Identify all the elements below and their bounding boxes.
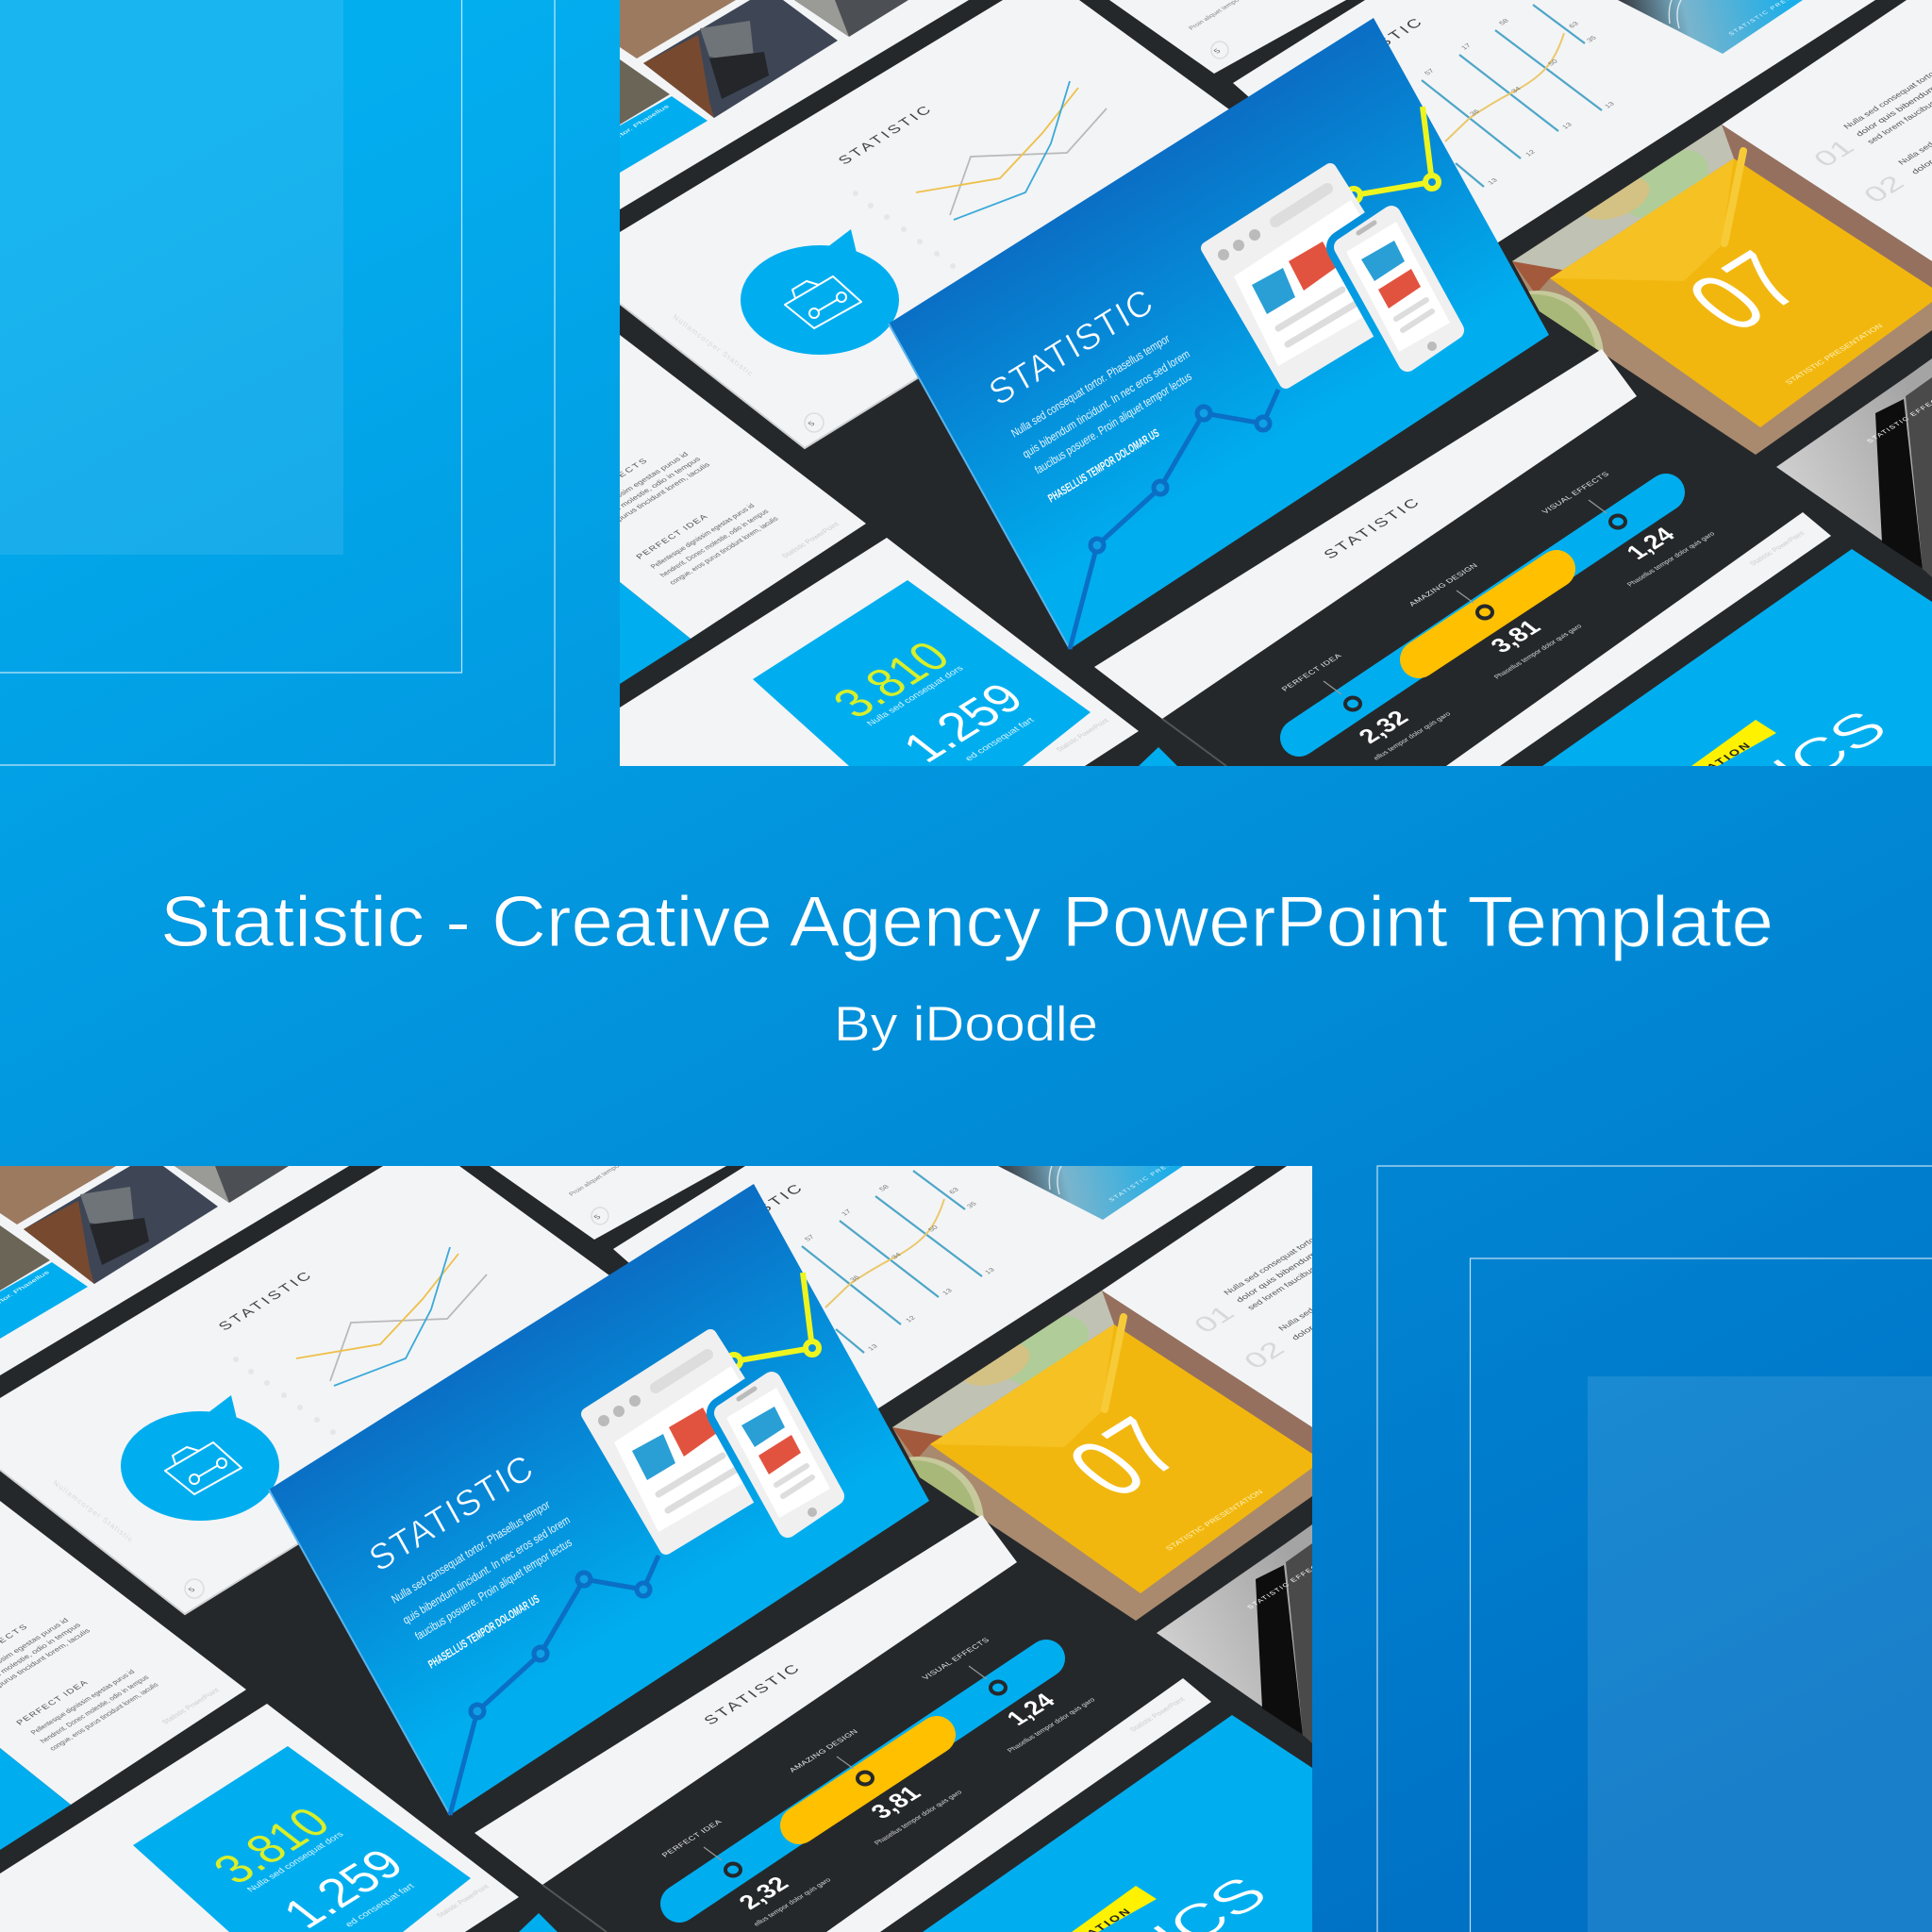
axis values: 63	[947, 1186, 960, 1195]
bar values: 3,81	[1485, 616, 1546, 657]
title: Statistic - Creative Agency PowerPoint Template	[160, 882, 1774, 962]
footer text: Statistic PowerPoint	[1127, 1695, 1187, 1733]
icon: phone	[724, 1381, 835, 1528]
bar captions: Phasellus tempor dolor quis garo	[873, 1789, 964, 1846]
page number	[185, 1579, 204, 1598]
bar labels: PERFECT IDEA	[659, 1818, 724, 1858]
slide: dark statistic bars	[475, 1515, 1211, 1932]
slide: upper page number: Proin aliquet tempor	[567, 1161, 624, 1197]
slide: big numbers	[620, 538, 1139, 771]
list copy: Nulla sed consequat tortor. Phasellus	[1276, 1247, 1412, 1332]
trend curve	[1445, 33, 1564, 142]
section caption: STATISTIC PRESENTATION	[1783, 322, 1885, 386]
copy: perfect idea: congue, eros purus tincidunt lorem, iaculis	[667, 515, 780, 586]
caption: ed consequat fart	[963, 716, 1037, 763]
yellow tag	[1072, 1886, 1157, 1932]
slide: grey photo	[1157, 1524, 1330, 1743]
footer bar	[1446, 512, 1831, 766]
axis values: 17	[1459, 42, 1473, 51]
bar values	[1353, 523, 1681, 747]
heading: STATISTIC	[703, 1182, 806, 1247]
bar labels: VISUAL EFFECTS	[920, 1636, 991, 1681]
bar labels: VISUAL EFFECTS	[1540, 470, 1611, 515]
heading: STATISTIC	[982, 281, 1159, 413]
bar values: 2,32	[1353, 707, 1414, 747]
line values	[1422, 5, 1602, 187]
copy: perfect idea: Pellentesque dignissim egestas purus id	[648, 502, 757, 570]
trend line upper	[1333, 107, 1439, 264]
bar highlight	[1419, 569, 1557, 659]
number 1.259: 1.259	[891, 675, 1036, 771]
bar captions: Phasellus tempor dolor quis garo	[1006, 1696, 1097, 1754]
slide: yellow section 07	[852, 1291, 1312, 1621]
heading: effects: PERFECT EFFECTS	[543, 457, 650, 524]
axis values: 34	[890, 1251, 903, 1260]
heading: STATISTIC	[836, 104, 935, 167]
tag text: ATION	[1704, 740, 1755, 773]
bar captions	[752, 1696, 1097, 1927]
cover photo thumbnail	[1618, 0, 1803, 54]
footer: Statistic PowerPoint	[779, 520, 841, 559]
bar highlight	[799, 1735, 937, 1825]
bar values: 1,24	[1001, 1689, 1061, 1729]
slide: statistic bar lines chart	[1233, 0, 1875, 259]
heading: STATISTIC	[216, 1270, 315, 1333]
number 02: 02	[1238, 1337, 1291, 1374]
slide: statistic with speech bubble	[0, 1166, 665, 1614]
page number: 5	[806, 420, 817, 427]
footer text: Statistic PowerPoint	[1747, 529, 1807, 567]
heading: STATISTIC	[1323, 16, 1425, 81]
axis values: 36	[848, 1274, 861, 1283]
caption on photo slide: tortor. Phasellus	[609, 104, 672, 142]
icon: speech bubble with briefcase	[121, 1395, 279, 1521]
body copy: faucibus posuere. Proin aliquet tempor lectus	[413, 1536, 575, 1643]
axis values: 36	[1468, 108, 1481, 117]
axis values: 35	[965, 1200, 978, 1209]
slide: text with perfect idea	[620, 335, 866, 684]
slide: statistic with speech bubble	[620, 0, 1285, 448]
number 07: 07	[1664, 235, 1825, 348]
copy: effects	[620, 451, 709, 523]
body copy: quis bibendum tincidunt. In nec eros sed lorem	[1021, 347, 1192, 461]
chart axis dots	[233, 1357, 336, 1435]
heading: STATISTIC	[700, 1662, 803, 1727]
bar captions: ellus tempor dolor quis garo	[752, 1876, 833, 1927]
number 01: 01	[1807, 135, 1860, 172]
bar values	[733, 1689, 1061, 1913]
list copy	[1843, 73, 1932, 174]
bottom slide collage	[0, 1138, 1412, 1932]
bar captions	[1372, 530, 1717, 761]
number 07: 07	[1044, 1401, 1206, 1514]
cover photo thumbnail	[998, 1138, 1211, 1220]
body copy: quis bibendum tincidunt. In nec eros sed lorem	[401, 1513, 573, 1627]
axis values: 13	[1560, 121, 1574, 130]
bar captions: Phasellus tempor dolor quis garo	[1492, 623, 1584, 680]
bottom-right frame decoration	[1377, 1166, 1932, 1932]
list copy: sed lorem faucibus posuere	[1245, 1246, 1348, 1311]
slide: upper page number: 5	[1211, 47, 1223, 55]
bar labels: PERFECT IDEA	[1279, 652, 1343, 692]
trend line upper	[713, 1273, 819, 1430]
slide: yellow section 07	[1472, 125, 1932, 455]
body copy	[390, 1497, 575, 1643]
axis values	[803, 1183, 996, 1352]
caption: Nulla sed consequat dors	[245, 1830, 346, 1894]
faint caption: Nullamcorper Statistic	[672, 312, 755, 378]
faint caption: Nullamcorper Statistic	[52, 1478, 135, 1544]
number 3.810: 3.810	[822, 633, 961, 726]
slide: photo grid	[609, 0, 969, 209]
axis values: 17	[840, 1208, 853, 1217]
top-left frame decoration	[0, 0, 555, 765]
bar labels: AMAZING DESIGN	[1407, 561, 1479, 608]
caption: ed consequat fart	[343, 1882, 417, 1929]
line chart	[296, 1247, 487, 1386]
slide: grey photo	[1776, 358, 1932, 577]
line chart	[916, 81, 1107, 220]
trend curve	[825, 1199, 944, 1307]
trend line lower	[450, 1556, 658, 1815]
body copy: faucibus posuere. Proin aliquet tempor lectus	[1033, 370, 1194, 477]
page number	[805, 413, 824, 432]
heading: STATISTIC	[362, 1447, 540, 1579]
icon: phone	[1343, 215, 1455, 362]
slide: blue statistics cover	[519, 1715, 1312, 1932]
slide: photo grid	[0, 1166, 349, 1375]
list copy	[1222, 1211, 1412, 1341]
body copy	[1009, 331, 1194, 477]
bar values: 1,24	[1621, 523, 1681, 563]
slide: text with perfect idea	[0, 1501, 246, 1850]
footer: Statistic PowerPoint	[434, 1883, 491, 1919]
axis values: 50	[926, 1224, 940, 1233]
copy: perfect idea	[28, 1668, 160, 1752]
bold tagline: PHASELLUS TEMPOR DOLOMAR US	[1046, 426, 1161, 506]
cover photo thumbnail: STATISTIC PRESENTATION	[1108, 1138, 1211, 1203]
slide: upper page number	[490, 1161, 726, 1240]
yellow tag	[1691, 720, 1776, 766]
heading: perfect idea: PERFECT IDEA	[14, 1678, 90, 1726]
icon: speech bubble with briefcase	[741, 229, 899, 355]
copy: perfect idea: congue, eros purus tincidunt lorem, iaculis	[47, 1681, 160, 1752]
bar values: 3,81	[865, 1782, 926, 1823]
bar track	[1299, 492, 1666, 738]
slide: numbered list	[1102, 1166, 1412, 1427]
number 3.810: 3.810	[202, 1799, 341, 1892]
body copy: Nulla sed consequat tortor. Phasellus tempor	[1009, 331, 1172, 441]
list copy: dolor quis bibendum tincidunt	[1234, 1228, 1354, 1304]
bar markers	[725, 1681, 1006, 1875]
caption: Nulla sed consequat dors	[865, 664, 966, 728]
copy: perfect idea: Pellentesque dignissim egestas purus id	[28, 1668, 137, 1736]
slide: upper page number	[1109, 0, 1346, 74]
bar values: 2,32	[733, 1873, 794, 1913]
slide: statistic bar lines chart	[613, 1138, 1256, 1425]
axis values: 58	[877, 1183, 891, 1192]
slide: numbered list	[1722, 0, 1932, 261]
heading: perfect idea: PERFECT IDEA	[634, 512, 709, 560]
axis values: 13	[1603, 100, 1616, 109]
subtitle: By iDoodle	[834, 997, 1098, 1052]
axis values	[1423, 17, 1616, 186]
slide: main blue statistic slide	[889, 18, 1549, 649]
bar captions: Phasellus tempor dolor quis garo	[1625, 530, 1717, 588]
number 01: 01	[1188, 1301, 1241, 1338]
footer bar	[826, 1678, 1211, 1932]
copy: perfect idea: hendrerit. Donec molestie, odio in tempus	[658, 508, 771, 578]
cover title: ICS	[1757, 700, 1901, 796]
axis values: 13	[983, 1266, 996, 1275]
axis values: 57	[803, 1233, 816, 1242]
icon: browser window	[1208, 170, 1415, 382]
trend line lower	[1070, 390, 1278, 649]
section caption: STATISTIC PRESENTATION	[1163, 1488, 1265, 1552]
bold tagline: PHASELLUS TEMPOR DOLOMAR US	[426, 1592, 541, 1672]
heading: STATISTIC	[1320, 496, 1423, 561]
axis values: 13	[941, 1287, 954, 1296]
list copy: Nulla sed consequat tortor. Phasellus	[1222, 1211, 1357, 1296]
axis values: 13	[1486, 176, 1499, 186]
leader lines	[704, 1666, 987, 1860]
slide: dark statistic bars	[1094, 349, 1831, 766]
slide: grey photo: STATISTIC EFFECTS	[1245, 1557, 1330, 1610]
bar captions: ellus tempor dolor quis garo	[1372, 710, 1453, 761]
axis values: 13	[866, 1342, 879, 1352]
axis values: 12	[1524, 148, 1537, 158]
leader lines	[1324, 500, 1607, 694]
axis values: 50	[1546, 58, 1559, 67]
bar track	[679, 1658, 1046, 1904]
footer: Statistic PowerPoint	[1054, 717, 1111, 753]
chart axis dots	[853, 191, 956, 269]
copy: perfect idea: hendrerit. Donec molestie, odio in tempus	[38, 1674, 151, 1744]
line values	[802, 1171, 982, 1353]
slide: blue statistics cover	[1139, 549, 1932, 796]
page number: 5	[186, 1586, 197, 1593]
axis values: 58	[1497, 17, 1510, 26]
top slide collage	[543, 0, 1932, 796]
copy: effects: congue, eros purus tincidunt lorem, iaculis	[571, 461, 711, 550]
slide: big numbers	[0, 1704, 519, 1932]
axis values: 35	[1585, 34, 1598, 43]
axis values: 57	[1423, 67, 1436, 76]
axis values: 63	[1567, 20, 1580, 29]
list copy: dolor quis bibendum tincidunt	[1290, 1266, 1409, 1341]
copy: effects: hendrerit. Donec molestie, odio in tempus	[562, 456, 702, 542]
slide: main blue statistic slide	[269, 1184, 929, 1815]
body copy: Nulla sed consequat tortor. Phasellus tempor	[390, 1497, 552, 1607]
copy: effects: Pellentesque dignissim egestas purus id	[555, 450, 691, 536]
slide: upper page number: 5	[591, 1213, 603, 1221]
bar labels	[659, 1636, 991, 1858]
bar markers	[1345, 515, 1625, 709]
copy: perfect idea	[648, 502, 780, 586]
number 02: 02	[1857, 171, 1910, 208]
bar labels: AMAZING DESIGN	[787, 1727, 859, 1774]
axis values: 34	[1509, 85, 1523, 94]
bar labels	[1279, 470, 1611, 692]
footer: Statistic PowerPoint	[159, 1686, 222, 1725]
axis values: 12	[904, 1314, 917, 1324]
icon: browser window	[588, 1336, 795, 1548]
